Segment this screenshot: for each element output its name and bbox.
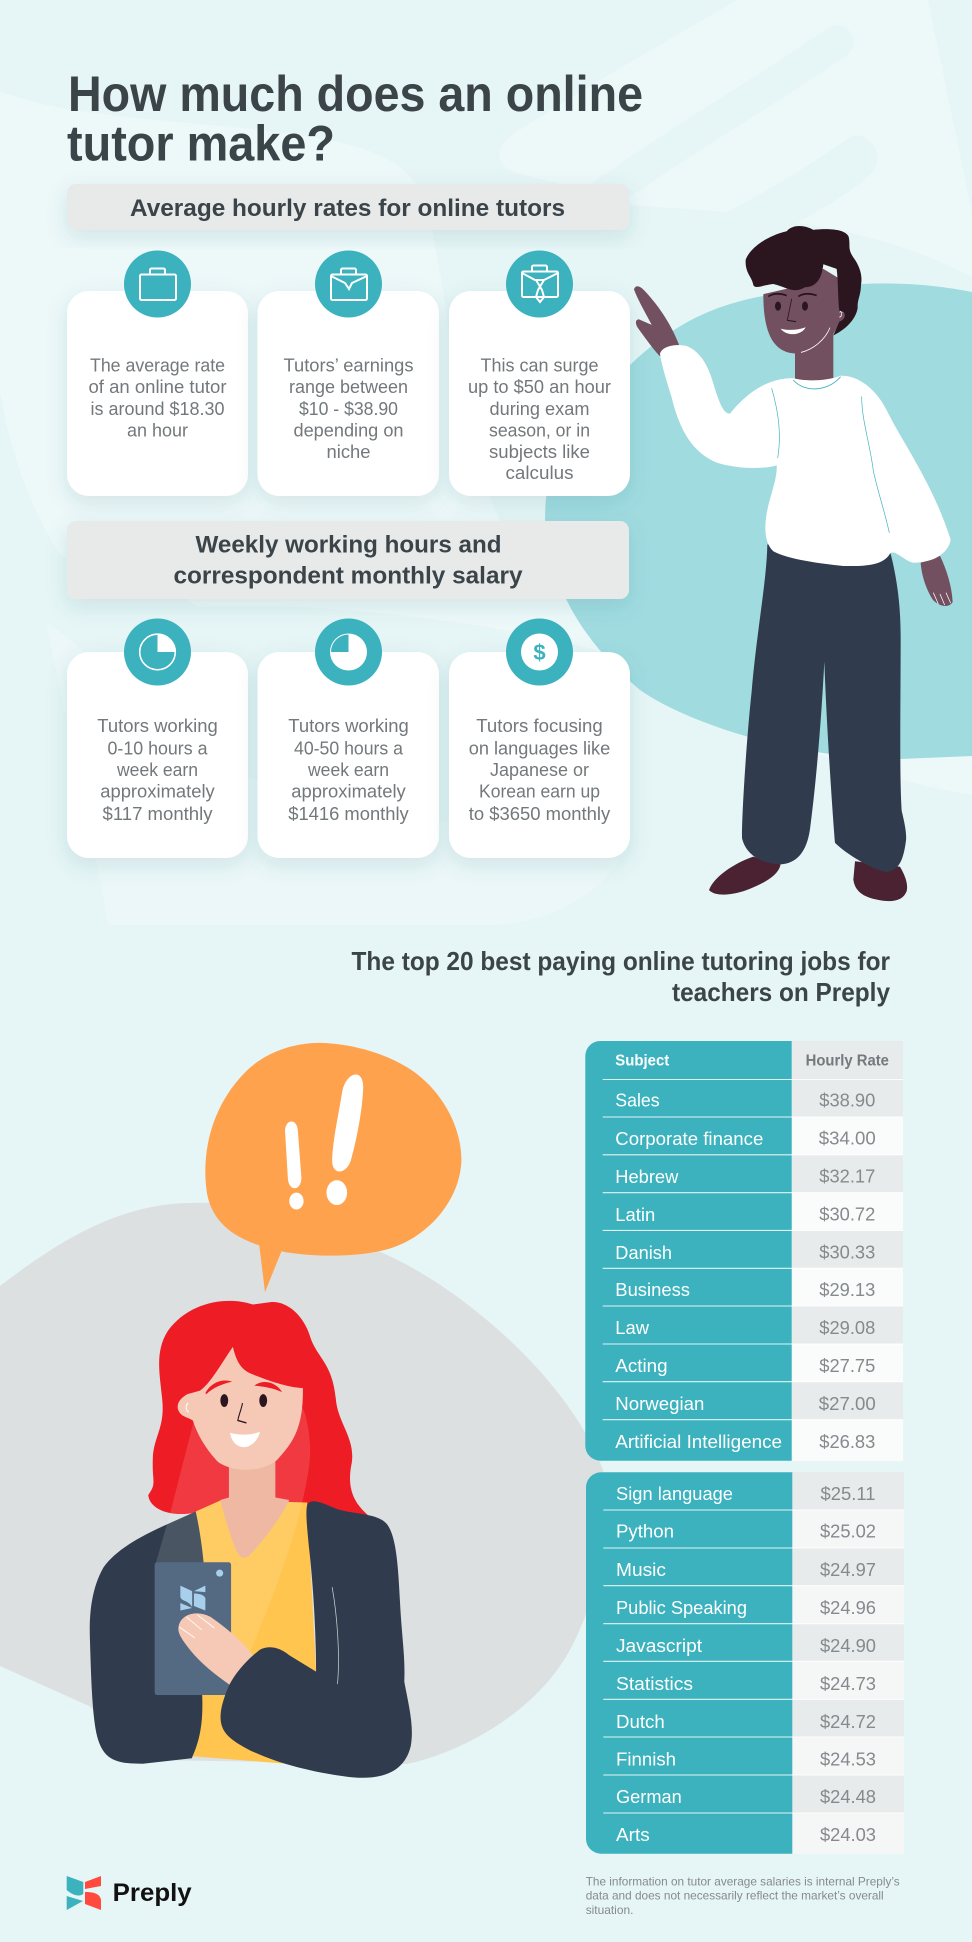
panel: exam season card: This can surge xyxy=(480,356,598,376)
panel: earnings range card: depending on xyxy=(294,420,404,440)
table: top ten subjects: $29.13 xyxy=(819,1279,875,1300)
table: next ten subjects: Dutch xyxy=(616,1711,665,1732)
table: top ten subjects: Subject xyxy=(615,1052,670,1070)
table: top ten subjects: Law xyxy=(615,1317,650,1338)
table: next ten subjects: $25.11 xyxy=(820,1483,876,1504)
icon: dollar coin xyxy=(506,618,573,686)
panel: languages card: on languages like xyxy=(469,738,610,758)
panel: average rate card: an hour xyxy=(127,420,188,440)
table: next ten subjects: Public Speaking xyxy=(616,1597,747,1618)
table: top ten subjects: Danish xyxy=(615,1242,672,1263)
table: next ten subjects: $24.53 xyxy=(820,1748,876,1770)
heading: average hourly rates: Average hourly rates for online tutors xyxy=(130,195,565,222)
table: top ten subjects: $30.72 xyxy=(819,1204,875,1224)
panel: exam season card: calculus xyxy=(506,463,574,483)
table: top ten subjects: $27.00 xyxy=(819,1393,876,1414)
panel: languages card xyxy=(449,618,630,858)
table: top ten subjects: Corporate finance xyxy=(615,1128,763,1149)
logo: Preply xyxy=(67,1876,192,1910)
heading: weekly working hours: correspondent monthly salary xyxy=(174,562,523,590)
panel: languages card: Tutors focusing xyxy=(476,716,603,736)
table: next ten subjects: $24.72 xyxy=(820,1711,876,1732)
title xyxy=(67,66,643,172)
footnote xyxy=(586,1874,900,1917)
icon: briefcase with flap xyxy=(315,250,382,318)
table: next ten subjects: Arts xyxy=(616,1824,650,1845)
table: top ten subjects: $27.75 xyxy=(819,1355,875,1376)
panel: languages card: Japanese or xyxy=(490,760,589,780)
table: top ten subjects: $38.90 xyxy=(819,1090,875,1110)
table: next ten subjects: Python xyxy=(616,1521,674,1542)
icon: quarter pie xyxy=(315,618,382,686)
table: next ten subjects: Sign language xyxy=(616,1483,733,1504)
panel: languages card: to $3650 monthly xyxy=(469,804,610,824)
table: next ten subjects: German xyxy=(616,1786,682,1807)
table: top ten subjects: $34.00 xyxy=(819,1128,876,1148)
table: next ten subjects: $24.97 xyxy=(820,1559,876,1580)
panel: 40-50 hours card: 40-50 hours a xyxy=(294,738,404,758)
section title: top 20 best paying jobs: teachers on Preply xyxy=(672,977,891,1007)
speech bubble with exclamation marks xyxy=(205,1043,461,1292)
table: top ten subjects: Latin xyxy=(615,1204,655,1225)
panel: earnings range card xyxy=(258,250,439,496)
table: top ten subjects: $26.83 xyxy=(819,1431,875,1452)
table: next ten subjects: Javascript xyxy=(616,1635,702,1656)
panel: earnings range card: niche xyxy=(326,442,370,462)
section title: top 20 best paying jobs: The top 20 best paying online tutoring jobs for xyxy=(352,946,890,976)
panel: 40-50 hours card: Tutors working xyxy=(288,716,409,736)
panel: 0-10 hours card: $117 monthly xyxy=(102,804,212,824)
table: top ten subjects: Business xyxy=(615,1279,690,1300)
table: top ten subjects: Hourly Rate xyxy=(806,1052,889,1070)
panel: 0-10 hours card xyxy=(67,618,248,858)
title: How much does an online xyxy=(68,66,643,122)
panel: earnings range card: range between xyxy=(289,377,408,397)
table: next ten subjects: $25.02 xyxy=(820,1521,876,1542)
table: top ten subjects: Artificial Intelligence xyxy=(615,1431,782,1452)
panel: 40-50 hours card: $1416 monthly xyxy=(288,804,409,824)
teal background blob behind tutor xyxy=(545,284,972,759)
table: next ten subjects: $24.73 xyxy=(820,1673,876,1694)
icon: briefcase xyxy=(124,250,191,318)
gray background blob behind woman xyxy=(0,1203,605,1764)
table: top ten subjects xyxy=(585,1041,903,1461)
illustration: woman with phone xyxy=(90,1301,412,1778)
icon: briefcase with tie xyxy=(506,250,573,318)
panel: average rate card: of an online tutor xyxy=(88,377,226,397)
panel: 40-50 hours card: approximately xyxy=(291,782,406,802)
footnote: data and does not necessarily reflect the market’s overall xyxy=(586,1888,884,1902)
table: next ten subjects: $24.03 xyxy=(820,1824,876,1845)
table: top ten subjects: Norwegian xyxy=(615,1393,704,1414)
panel: 0-10 hours card: Tutors working xyxy=(97,716,218,736)
heading: weekly working hours: Weekly working hours and xyxy=(196,532,502,558)
panel: exam season card: during exam xyxy=(490,399,590,419)
panel: earnings range card: Tutors’ earnings xyxy=(284,356,414,376)
icon: dollar coin: $ xyxy=(533,640,546,665)
panel: 0-10 hours card: approximately xyxy=(100,782,215,802)
panel: average rate card xyxy=(67,250,248,496)
section title: top 20 best paying jobs xyxy=(352,946,891,1007)
panel: earnings range card: $10 - $38.90 xyxy=(299,399,398,419)
footnote: The information on tutor average salaries is internal Preply’s xyxy=(586,1874,900,1888)
table: next ten subjects: Finnish xyxy=(616,1748,676,1770)
illustration: tutor pointing xyxy=(634,226,953,901)
heading: average hourly rates xyxy=(67,184,629,230)
table: top ten subjects: $32.17 xyxy=(819,1166,875,1186)
heading: weekly working hours xyxy=(67,521,629,599)
panel: exam season card: subjects like xyxy=(489,442,590,462)
table: top ten subjects: $30.33 xyxy=(819,1242,875,1262)
logo: Preply: Preply xyxy=(113,1879,192,1907)
panel: average rate card: The average rate xyxy=(90,356,225,376)
table: next ten subjects: $24.90 xyxy=(820,1635,876,1656)
panel: 0-10 hours card: 0-10 hours a xyxy=(108,738,208,758)
panel: exam season card: up to $50 an hour xyxy=(468,377,611,397)
table: next ten subjects: Music xyxy=(616,1559,666,1580)
table: top ten subjects: $29.08 xyxy=(819,1317,875,1338)
panel: languages card: Korean earn up xyxy=(479,782,600,802)
panel: 40-50 hours card xyxy=(258,618,439,858)
panel: 40-50 hours card: week earn xyxy=(307,760,389,780)
panel: exam season card xyxy=(449,250,630,496)
table: top ten subjects: Sales xyxy=(615,1090,660,1110)
table: next ten subjects: $24.96 xyxy=(820,1597,876,1618)
table: next ten subjects: $24.48 xyxy=(820,1786,876,1807)
panel: exam season card: season, or in xyxy=(489,420,590,440)
table: top ten subjects: Acting xyxy=(615,1355,668,1376)
table: next ten subjects xyxy=(586,1472,904,1854)
table: top ten subjects: Hebrew xyxy=(615,1166,679,1187)
title: tutor make? xyxy=(67,116,335,172)
table: next ten subjects: Statistics xyxy=(616,1673,693,1694)
panel: 0-10 hours card: week earn xyxy=(116,760,198,780)
footnote: situation. xyxy=(586,1903,633,1917)
panel: average rate card: is around $18.30 xyxy=(90,399,224,419)
icon: three-quarter pie xyxy=(124,618,191,686)
